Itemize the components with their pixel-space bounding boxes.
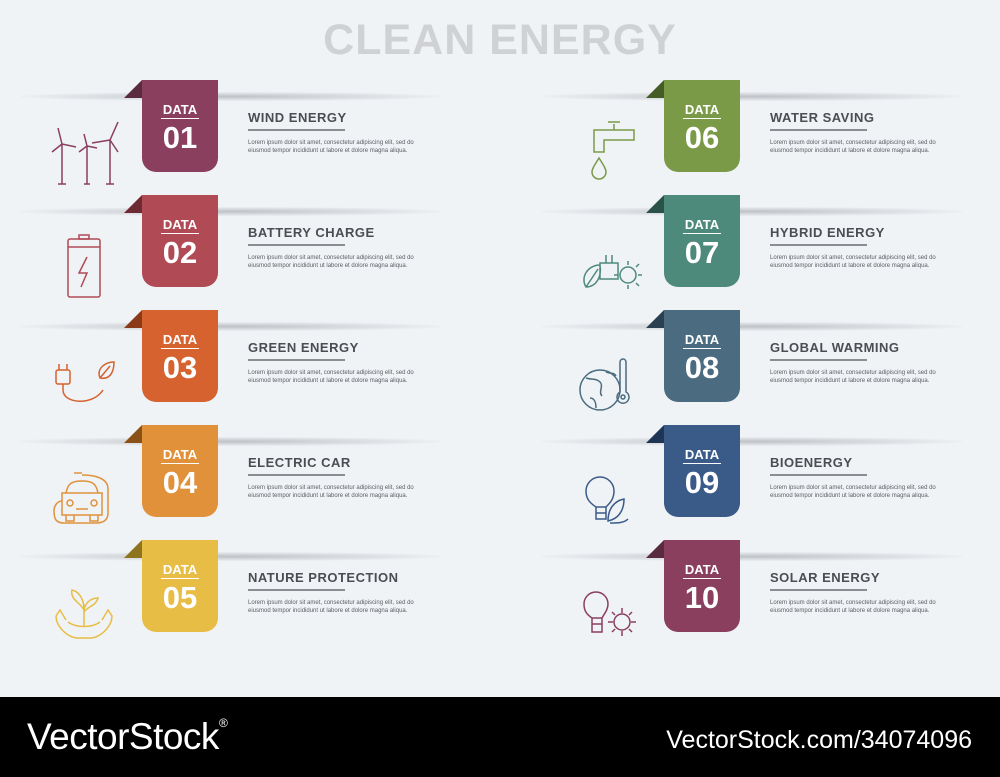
- tab: 10: 10: [685, 580, 719, 615]
- icon: battery: [67, 234, 101, 298]
- tab: 06: DATA: [685, 102, 719, 117]
- panel: 01 wind energy: [40, 80, 422, 185]
- tab: 05: DATA: [163, 562, 197, 577]
- tab: 07: 07: [685, 235, 719, 270]
- icon: globe thermometer: [579, 358, 630, 411]
- icon: bulb with leaves: [585, 476, 628, 524]
- text block: Lorem ipsum dolor sit amet, consectetur adipiscing elit, sed do eiusmod tempor incididunt ut labore et dolore magna aliqua.: [248, 485, 414, 499]
- heading: GLOBAL WARMING: [770, 340, 900, 355]
- tab: 06: [664, 80, 740, 172]
- tab: 04: 04: [163, 465, 197, 500]
- text block: Lorem ipsum dolor sit amet, consectetur adipiscing elit, sed do eiusmod tempor incididunt ut labore et dolore magna aliqua.: [770, 140, 936, 154]
- tab: 07: [664, 195, 740, 287]
- tab: 02: 02: [163, 235, 197, 270]
- icon: hands with plant: [55, 589, 113, 639]
- tab: 10: [664, 540, 740, 632]
- tab: 06: 06: [685, 120, 719, 155]
- tab: 09: [664, 425, 740, 517]
- tab: 02: [142, 195, 218, 287]
- tab: 08: 08: [685, 350, 719, 385]
- text block: Lorem ipsum dolor sit amet, consectetur adipiscing elit, sed do eiusmod tempor incididunt ut labore et dolore magna aliqua.: [248, 600, 414, 614]
- tab: 05: [142, 540, 218, 632]
- footer url: VectorStock.com/34074096: [666, 726, 972, 754]
- tab: 07: DATA: [685, 217, 719, 232]
- icon: electric car: [53, 472, 109, 524]
- tab: 02: DATA: [163, 217, 197, 232]
- tab: 05: 05: [163, 580, 197, 615]
- panel: 02 battery charge: [40, 195, 422, 298]
- icon: wind turbines: [52, 122, 119, 185]
- tab: 03: 03: [163, 350, 197, 385]
- panel: 03 green energy: [40, 310, 422, 402]
- text block: Lorem ipsum dolor sit amet, consectetur adipiscing elit, sed do eiusmod tempor incididunt ut labore et dolore magna aliqua.: [770, 255, 936, 269]
- tab: 01: DATA: [163, 102, 197, 117]
- text block: Lorem ipsum dolor sit amet, consectetur adipiscing elit, sed do eiusmod tempor incididunt ut labore et dolore magna aliqua.: [248, 255, 414, 269]
- heading: SOLAR ENERGY: [770, 570, 880, 585]
- text block: Lorem ipsum dolor sit amet, consectetur adipiscing elit, sed do eiusmod tempor incididunt ut labore et dolore magna aliqua.: [248, 370, 414, 384]
- tab: 10: DATA: [685, 562, 719, 577]
- heading: HYBRID ENERGY: [770, 225, 885, 240]
- text block: Lorem ipsum dolor sit amet, consectetur adipiscing elit, sed do eiusmod tempor incididunt ut labore et dolore magna aliqua.: [248, 140, 414, 154]
- panel: 07 hybrid energy: [562, 195, 942, 289]
- footer: [0, 697, 1000, 777]
- tab: 01: [142, 80, 218, 172]
- heading: WATER SAVING: [770, 110, 874, 125]
- heading: NATURE PROTECTION: [248, 570, 399, 585]
- icon: plug with leaf: [55, 361, 115, 402]
- footer logo: VectorStock®: [27, 716, 227, 757]
- tab: 08: DATA: [685, 332, 719, 347]
- tab: 03: DATA: [163, 332, 197, 347]
- text block: Lorem ipsum dolor sit amet, consectetur adipiscing elit, sed do eiusmod tempor incididunt ut labore et dolore magna aliqua.: [770, 600, 936, 614]
- icon: plug leaf sun: [583, 255, 642, 289]
- tab: 01: 01: [163, 120, 197, 155]
- tab: 04: [142, 425, 218, 517]
- panel: 04 electric car: [40, 425, 422, 524]
- title: CLEAN ENERGY: [323, 16, 677, 64]
- icon: bulb with sun: [583, 591, 636, 636]
- panel: 09 bioenergy: [562, 425, 942, 524]
- tab: 08: [664, 310, 740, 402]
- heading: WIND ENERGY: [248, 110, 347, 125]
- text block: Lorem ipsum dolor sit amet, consectetur adipiscing elit, sed do eiusmod tempor incididunt ut labore et dolore magna aliqua.: [770, 370, 936, 384]
- panel: 05 nature protection: [40, 540, 422, 639]
- tab: 09: DATA: [685, 447, 719, 462]
- icon: faucet: [591, 121, 635, 180]
- heading: BATTERY CHARGE: [248, 225, 375, 240]
- panel: 06 water saving: [562, 80, 942, 180]
- tab: 09: 09: [685, 465, 719, 500]
- panel: 10 solar energy: [562, 540, 942, 636]
- text block: Lorem ipsum dolor sit amet, consectetur adipiscing elit, sed do eiusmod tempor incididunt ut labore et dolore magna aliqua.: [770, 485, 936, 499]
- heading: BIOENERGY: [770, 455, 853, 470]
- heading: GREEN ENERGY: [248, 340, 359, 355]
- tab: 04: DATA: [163, 447, 197, 462]
- panel: 08 global warming: [562, 310, 942, 411]
- heading: ELECTRIC CAR: [248, 455, 351, 470]
- tab: 03: [142, 310, 218, 402]
